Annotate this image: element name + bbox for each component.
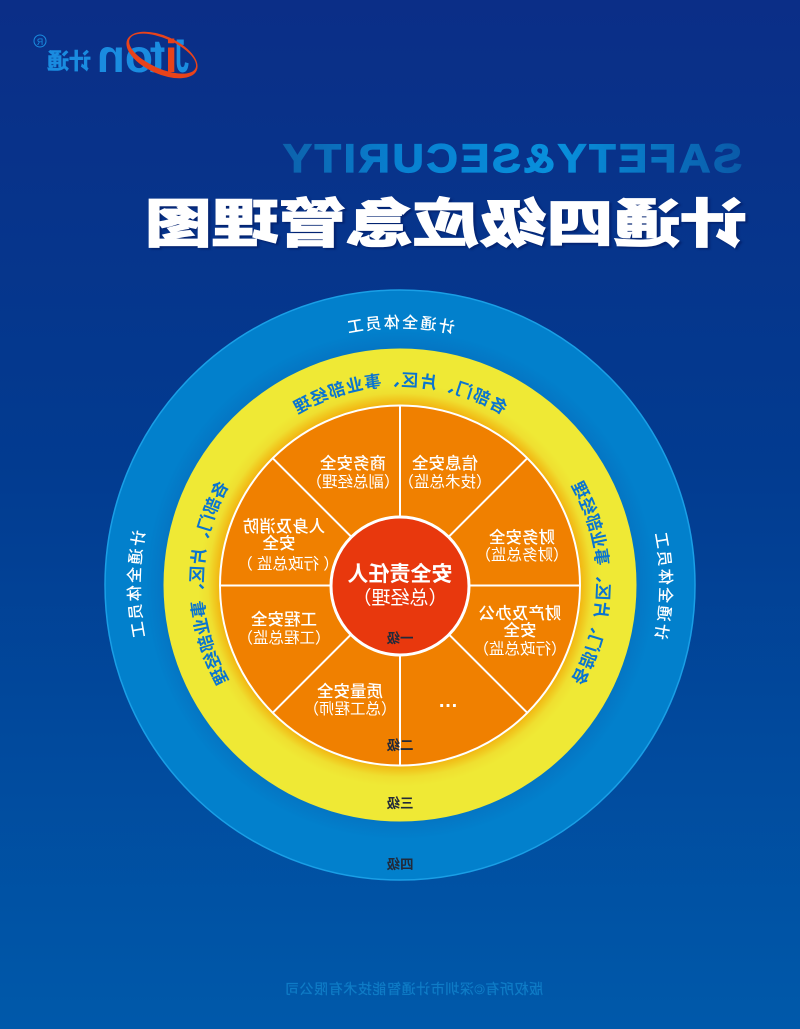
diagram: [104, 289, 696, 881]
segment: business security: [306, 453, 400, 491]
segment: finance security: 财务安全: [488, 527, 555, 547]
level labels: 三级: [386, 795, 414, 811]
segment: information security: 信息安全: [412, 453, 478, 473]
core text: [348, 562, 452, 609]
logo wordmark: [97, 30, 189, 82]
logo wordmark: J: [175, 30, 189, 82]
blue ring text: 计通全体员工: [348, 314, 454, 334]
core text: （总经理）: [352, 587, 448, 609]
registered mark: R: [36, 37, 43, 47]
level labels: [386, 630, 414, 872]
segment: business security: （副总经理）: [306, 473, 400, 491]
ring: level three: [164, 348, 636, 822]
segment: ellipsis: …: [438, 690, 458, 712]
logo wordmark: i: [165, 30, 178, 82]
segment: quality security: （总工程师）: [303, 700, 397, 718]
segment: personal and fire security: 人身及消防: [243, 517, 325, 536]
segment: quality security: [303, 681, 397, 718]
core text: 安全责任人: [348, 562, 452, 586]
segment: property and office security: 财产及办公: [479, 604, 561, 623]
logo wordmark: n: [97, 30, 125, 82]
logo chinese name: 计通: [47, 49, 91, 74]
core: level one: [331, 517, 469, 655]
ring: level four: [105, 290, 695, 880]
logo: [34, 22, 204, 88]
level labels: 四级: [386, 856, 414, 872]
english subtitle: SAFETY&SECURITY: [283, 135, 742, 181]
yellow ring text: 各部门、片区、事业部经理: [292, 372, 507, 415]
blue ring text: 计通全体员工: [126, 530, 146, 638]
ring: level two: [220, 406, 580, 766]
logo swoosh: [120, 22, 204, 88]
registered mark: [34, 35, 46, 47]
yellow ring text: 各部门、片区、事业部经理: [189, 482, 230, 686]
blue ring text: 计通全体员工: [654, 532, 674, 640]
blue ring text: [126, 314, 674, 640]
segment: business security: 商务安全: [320, 453, 386, 473]
segment: information security: （技术总监）: [398, 473, 492, 491]
segment: engineering security: [237, 609, 331, 647]
level labels: 二级: [386, 737, 414, 753]
logo wordmark: o: [125, 30, 153, 82]
segment: engineering security: （工程总监）: [237, 629, 331, 647]
segment: quality security: 质量安全: [316, 681, 383, 701]
logo wordmark: t: [150, 30, 165, 82]
segment: property and office security: （行政总监）: [473, 640, 567, 658]
segment: finance security: [475, 527, 569, 564]
yellow ring text: 各部门、片区、事业部经理: [570, 480, 611, 684]
yellow ring text: [189, 372, 611, 686]
segment: property and office security: [473, 604, 567, 658]
copyright footer: 版权所有©深圳市计通智能技术有限公司: [285, 981, 543, 997]
segment: property and office security: 安全: [503, 620, 536, 640]
segment: finance security: （财务总监）: [475, 546, 569, 564]
segment: engineering security: 工程安全: [250, 609, 317, 629]
segment: personal and fire security: （ 行政总监 ）: [237, 555, 339, 573]
level labels: 一级: [386, 630, 414, 646]
segment: personal and fire security: 安全: [262, 533, 296, 553]
main title: 计通四级应急管理图: [145, 195, 747, 253]
segment: information security: [398, 453, 492, 491]
segment: personal and fire security: [237, 517, 339, 573]
